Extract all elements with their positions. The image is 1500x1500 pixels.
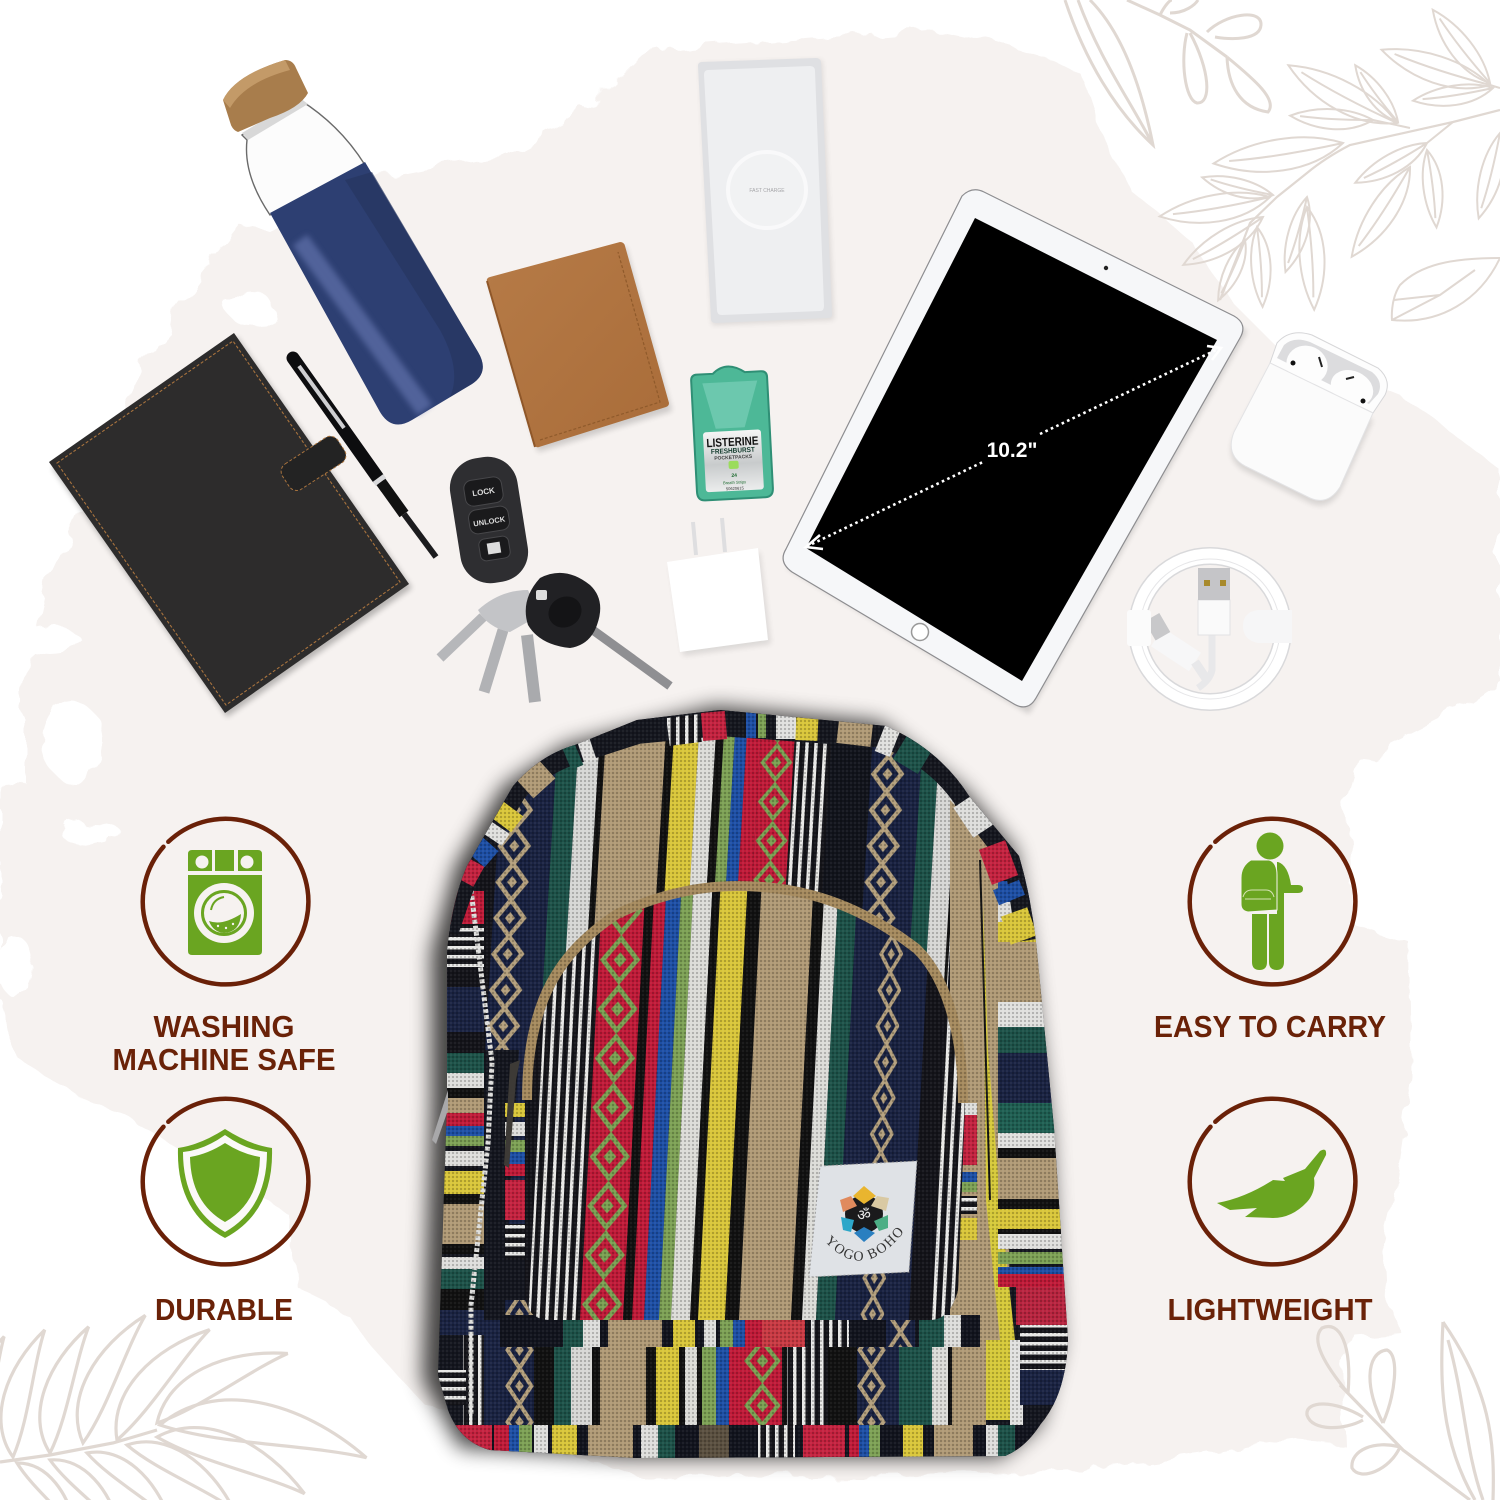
mint strips pack: 50620615 bbox=[726, 485, 745, 491]
mint strips pack: 24 bbox=[731, 473, 737, 479]
decorative frond: bottom left bbox=[0, 1304, 372, 1500]
earbud left bbox=[1280, 339, 1334, 391]
water bottle bbox=[223, 60, 483, 424]
feature: lightweight bbox=[1168, 1099, 1373, 1327]
unlock button bbox=[467, 505, 511, 535]
key fob: UNLOCK bbox=[473, 514, 506, 528]
lock button bbox=[463, 476, 504, 507]
left side stripes bbox=[436, 890, 492, 1415]
wall charger bbox=[667, 518, 771, 656]
mint pack text: LISTERINE bbox=[706, 434, 759, 450]
front pocket bbox=[522, 881, 968, 1320]
notebook bbox=[49, 333, 412, 717]
earbud right bbox=[1325, 363, 1379, 413]
weave texture bbox=[420, 700, 1080, 1470]
tablet screen bbox=[806, 218, 1217, 681]
icon: feather bbox=[1217, 1150, 1326, 1218]
backpack bbox=[406, 691, 1076, 1474]
feature: durable bbox=[143, 1099, 308, 1327]
size label: 10.2" bbox=[987, 439, 1037, 462]
bottle glass bbox=[242, 100, 365, 215]
bottom rim bbox=[456, 1425, 1040, 1458]
car key head bbox=[526, 573, 600, 648]
feature: washing machine safe bbox=[112, 819, 336, 1077]
ring bbox=[1190, 1099, 1355, 1264]
charging cable bbox=[1127, 556, 1292, 702]
power bank: FAST CHARGE bbox=[749, 188, 785, 194]
ring bbox=[143, 1099, 308, 1264]
icon: person with backpack bbox=[1241, 832, 1303, 970]
label: LIGHTWEIGHT bbox=[1168, 1293, 1373, 1327]
usb connector bbox=[1198, 635, 1212, 688]
top rim bbox=[445, 722, 1030, 940]
brand logo: ॐ bbox=[857, 1207, 871, 1224]
bottom panel stripes bbox=[463, 1300, 1023, 1430]
pocket zipper band bbox=[527, 886, 963, 1103]
label: DURABLE bbox=[155, 1293, 293, 1327]
brand name: YOGO BOHO bbox=[826, 1228, 902, 1261]
right side tan panel bbox=[950, 800, 1010, 1350]
label: WASHING bbox=[154, 1010, 294, 1044]
feature: washing machine safe: MACHINE SAFE bbox=[112, 1043, 336, 1077]
decorative branch: top middle bbox=[1065, 0, 1270, 145]
icon: shield bbox=[178, 1129, 272, 1238]
key fob: LOCK bbox=[472, 486, 496, 498]
silver keys bbox=[440, 590, 670, 702]
mint strips pack bbox=[691, 364, 773, 501]
decorative branch: bottom right bbox=[1307, 1322, 1493, 1500]
notebook clasp bbox=[278, 433, 349, 494]
zipper pull bbox=[432, 1060, 520, 1168]
lightning connector bbox=[1157, 637, 1195, 662]
case body bbox=[1231, 363, 1373, 500]
case lid bbox=[1270, 333, 1387, 413]
feature: easy to carry bbox=[1154, 819, 1386, 1044]
key fob bbox=[446, 452, 532, 588]
earbuds case bbox=[1231, 333, 1387, 505]
ring bbox=[143, 819, 308, 984]
tablet home button bbox=[912, 624, 928, 640]
tablet bbox=[783, 190, 1247, 714]
top panel stripes bbox=[458, 730, 963, 1230]
label: EASY TO CARRY bbox=[1154, 1010, 1386, 1044]
bottle cap bbox=[223, 60, 308, 132]
ring bbox=[1190, 819, 1355, 984]
bottle sleeve bbox=[270, 162, 483, 424]
icon: washing machine bbox=[188, 850, 262, 955]
mint strips pack: Breath Strips bbox=[723, 479, 746, 485]
pen bbox=[293, 358, 436, 557]
decorative leaves: top right bbox=[1158, 4, 1500, 321]
right side stripes bbox=[998, 876, 1068, 1405]
diagonal size arrow bbox=[806, 346, 1221, 549]
trunk button bbox=[478, 535, 511, 562]
mint strips pack: FRESHBURST bbox=[711, 447, 756, 456]
power bank bbox=[698, 58, 834, 325]
wireless charging ring bbox=[728, 152, 806, 228]
mint strips pack: POCKETPACKS bbox=[714, 454, 753, 462]
leather wallet bbox=[487, 242, 672, 452]
brand label bbox=[808, 1160, 918, 1278]
pieces beside pocket bbox=[505, 1103, 977, 1260]
cable straps bbox=[1127, 610, 1151, 646]
pocket flap band bbox=[500, 1315, 980, 1347]
